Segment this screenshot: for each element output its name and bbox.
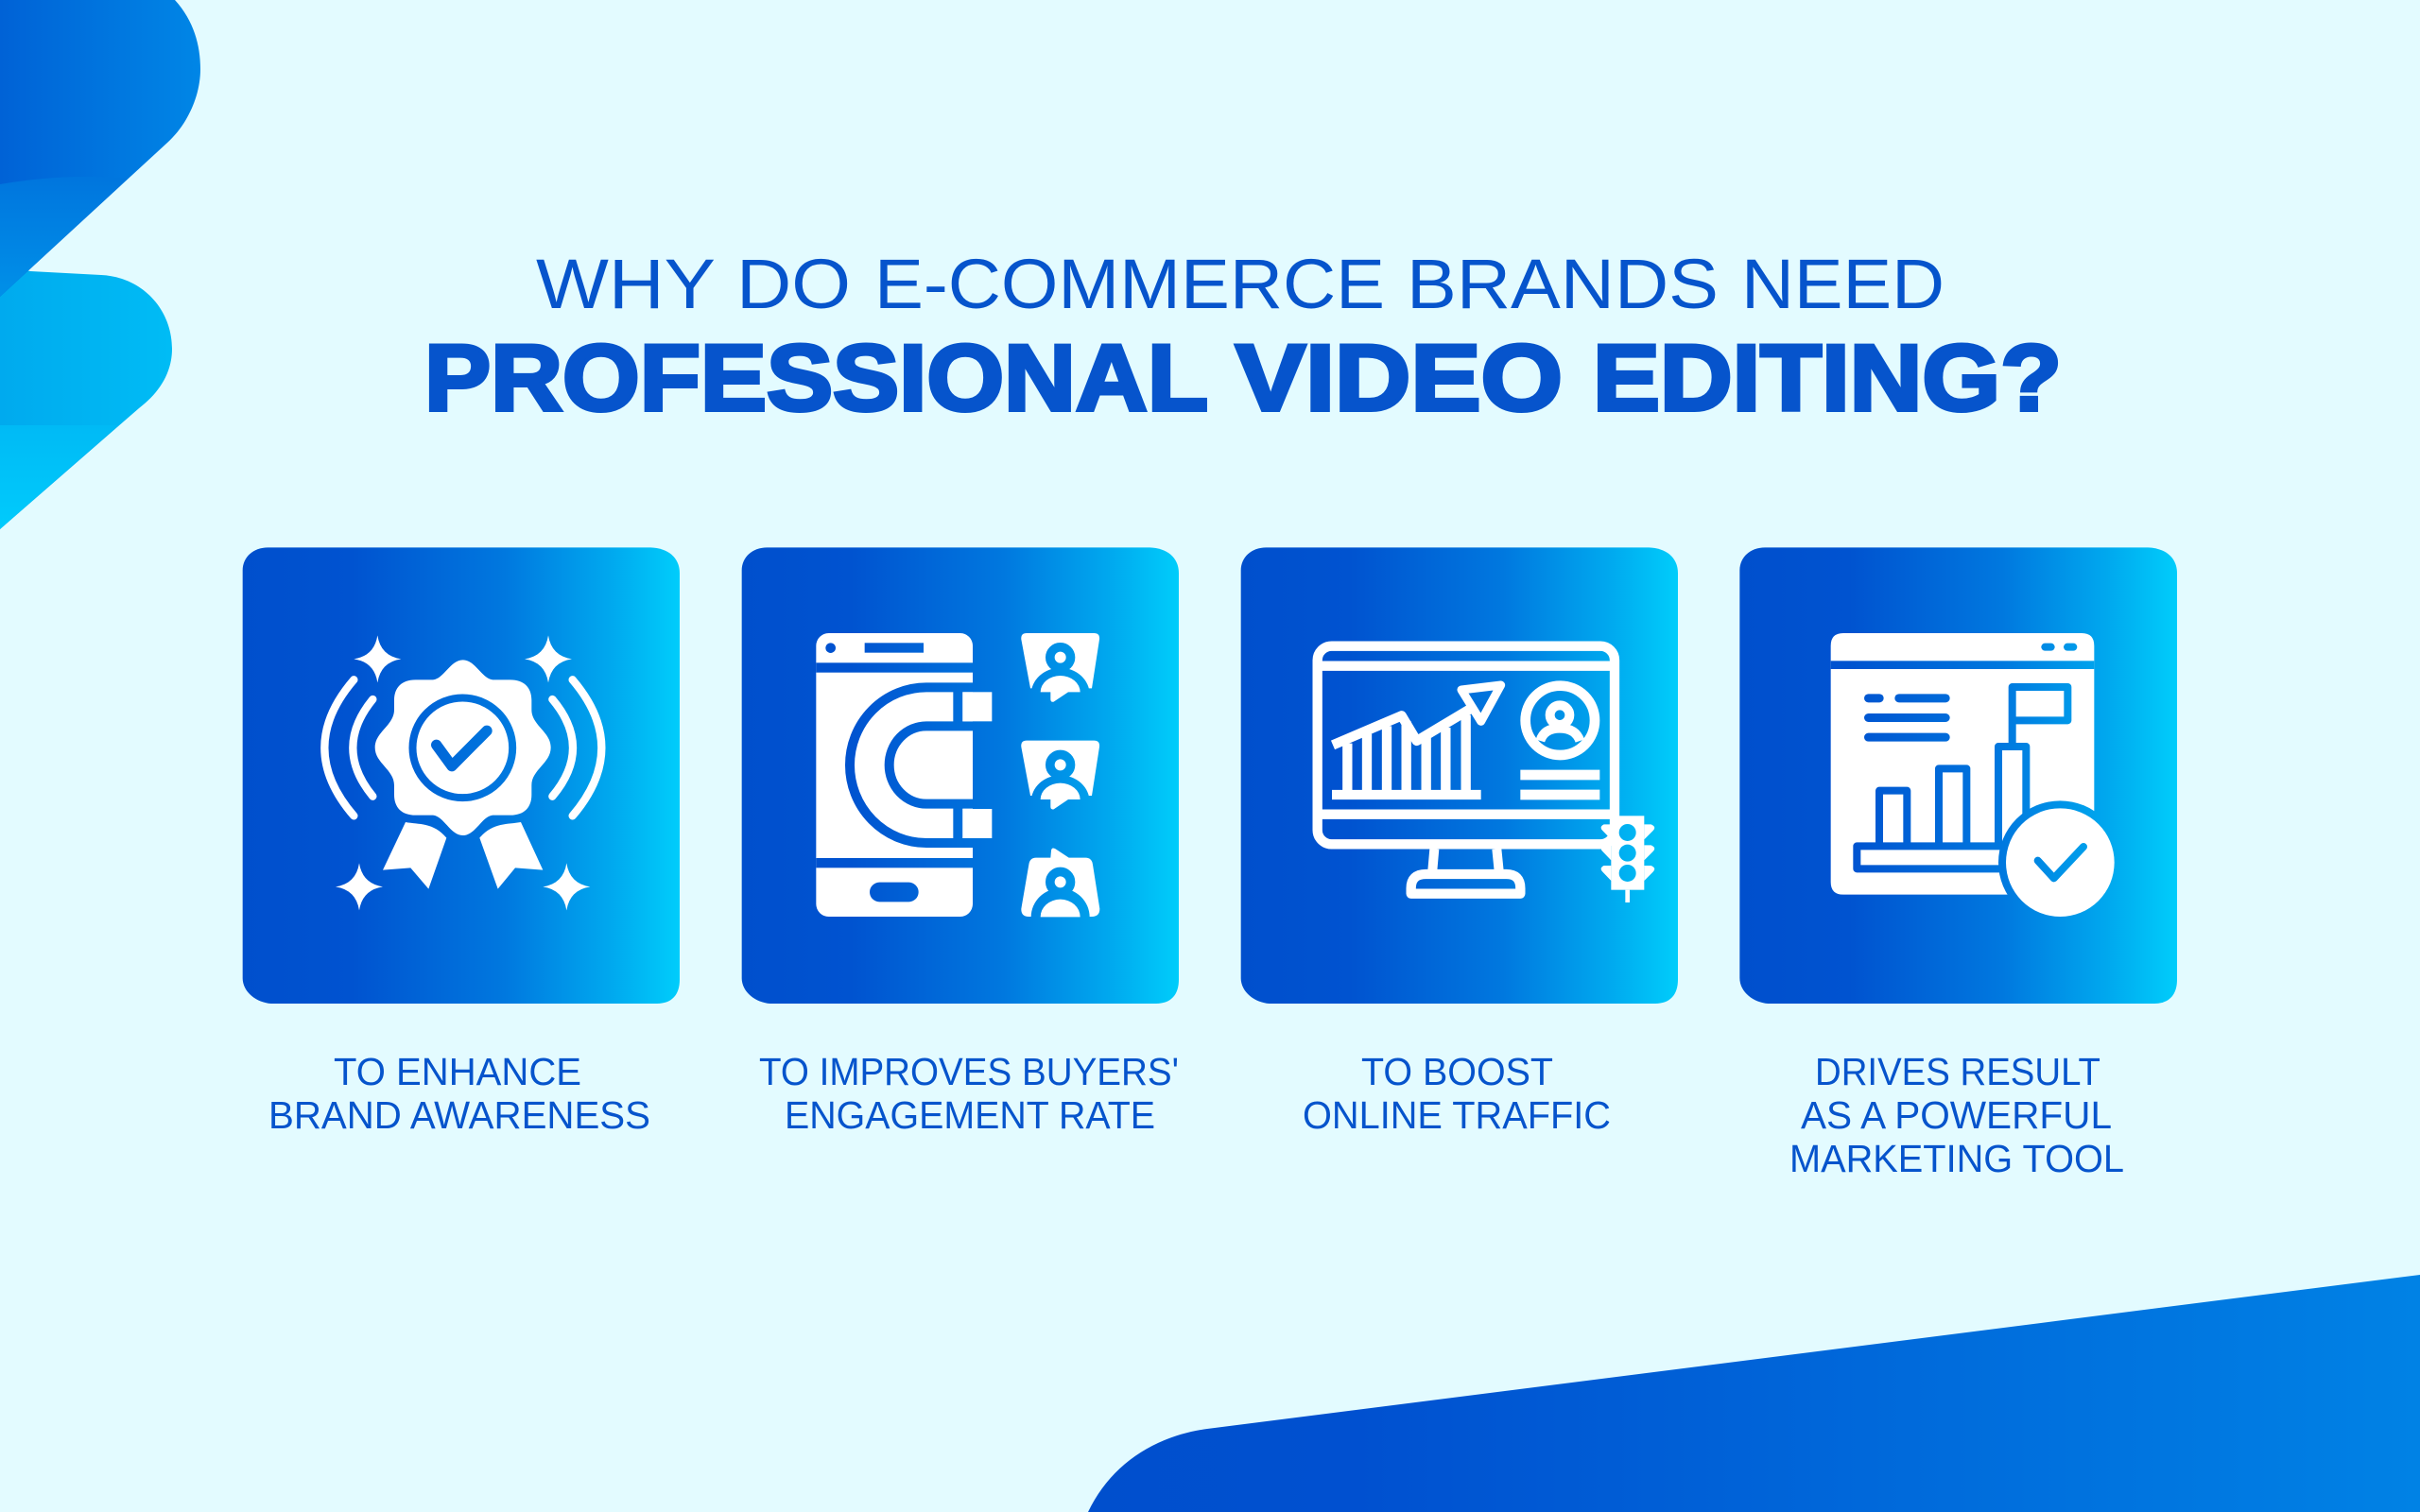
card background: [1241, 547, 1678, 1004]
caption: online traffic: ONLINE TRAFFIC: [1303, 1093, 1611, 1137]
caption: buyer engagement: [759, 1050, 1179, 1137]
decorative shape: top-left blue ribbon: [0, 0, 200, 297]
icon: person card 1: [1021, 633, 1099, 702]
card 2: buyer engagement: [742, 547, 1179, 1004]
card background: [742, 547, 1179, 1004]
caption: online traffic: [1303, 1050, 1611, 1137]
card 3: online traffic: [1241, 547, 1678, 1004]
caption: online traffic: TO BOOST: [1361, 1050, 1553, 1093]
title line 1: NEED: [1741, 245, 1945, 323]
decorative shape: bottom-right blue wedge: [1088, 1275, 2420, 1512]
caption: marketing tool: [1789, 1050, 2124, 1180]
caption: brand awareness: BRAND AWARENESS: [268, 1093, 650, 1137]
caption: marketing tool: AS A POWERFUL: [1801, 1093, 2112, 1137]
title: [424, 245, 2062, 430]
icon: person card 2: [1021, 741, 1099, 809]
title line 2: PROFESSIONAL: [424, 325, 1208, 430]
icon: check circle: [1998, 800, 2122, 924]
card 1: brand awareness: [243, 547, 680, 1004]
title line 1: E-COMMERCE: [874, 245, 1385, 323]
caption: brand awareness: [268, 1050, 650, 1137]
title line 1: DO: [736, 245, 851, 323]
caption: buyer engagement: TO IMPROVES BUYERS': [759, 1050, 1179, 1093]
title line 1: [536, 245, 1945, 323]
title line 2: EDITING?: [1593, 325, 2062, 430]
icon: person card 3: [1021, 848, 1099, 918]
title line 1: WHY: [536, 245, 716, 323]
icon: award badge with sparkles: [324, 635, 601, 910]
title line 2: VIDEO: [1236, 325, 1563, 430]
card background: [243, 547, 680, 1004]
caption: marketing tool: MARKETING TOOL: [1789, 1137, 2124, 1180]
icon: phone with magnet: [816, 633, 992, 917]
icon: monitor with rising chart: [1318, 646, 1615, 894]
title line 1: BRANDS: [1407, 245, 1719, 323]
title line 2: [424, 325, 2062, 430]
card background: [1739, 547, 2177, 1004]
caption: brand awareness: TO ENHANCE: [334, 1050, 581, 1093]
caption: marketing tool: DRIVES RESULT: [1815, 1050, 2100, 1093]
decorative shape: top-left cyan ribbon: [0, 265, 172, 529]
icon: traffic light: [1601, 816, 1654, 902]
card 4: marketing tool: [1739, 547, 2177, 1004]
caption: buyer engagement: ENGAGEMENT RATE: [785, 1093, 1155, 1137]
icon: browser window with bar chart and flag: [1831, 633, 2094, 895]
